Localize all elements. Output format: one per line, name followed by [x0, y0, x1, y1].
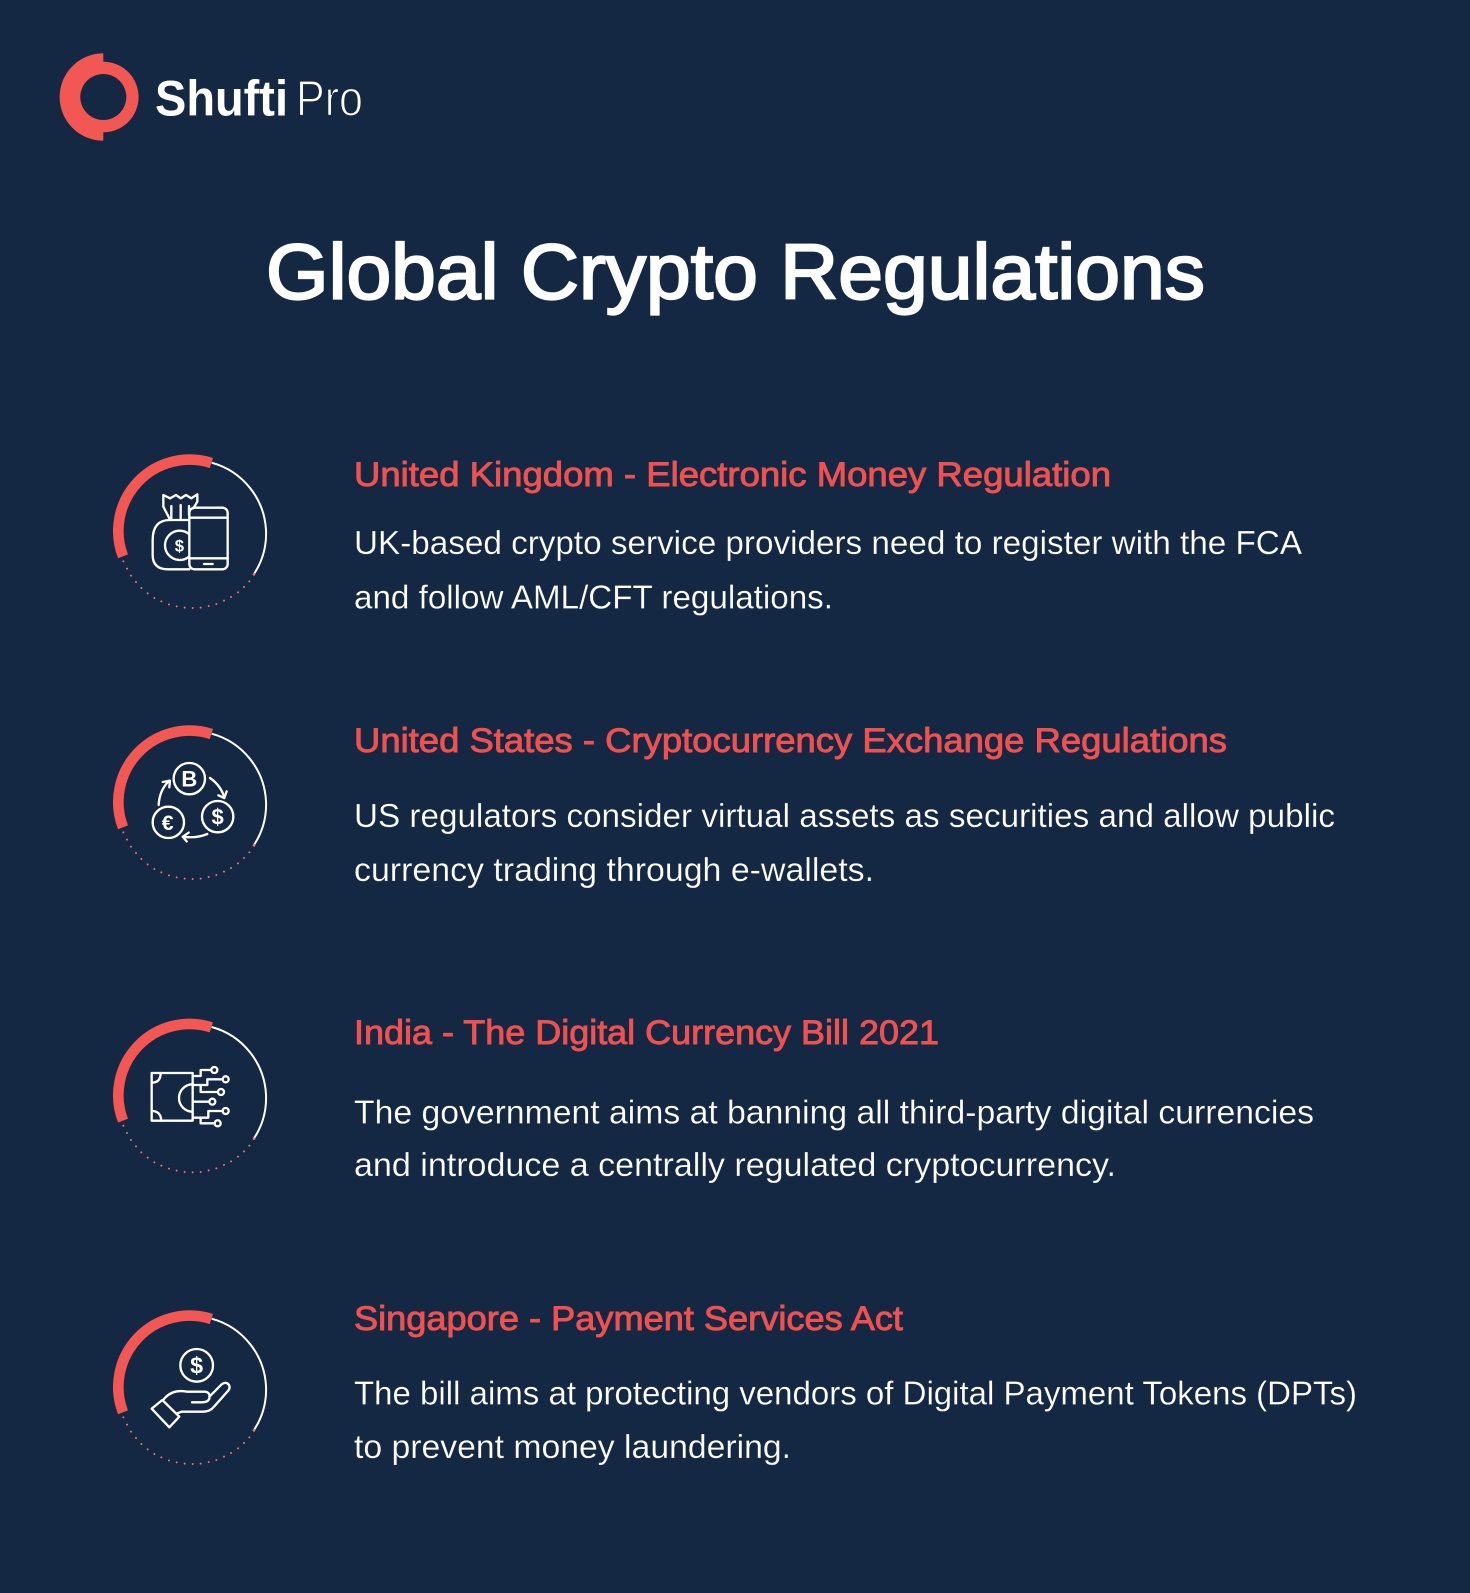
- row: India: [118, 1014, 1314, 1183]
- progress ring: [118, 1024, 266, 1173]
- icon: hand holding dollar coin: [152, 1349, 230, 1427]
- body text: [354, 1094, 1314, 1183]
- row: United Kingdom: [118, 456, 1302, 616]
- icon: hand holding dollar coin: $: [190, 1353, 203, 1379]
- logo mark: coral ring: [60, 53, 139, 141]
- icon: bitcoin, dollar, euro exchange: [153, 763, 233, 841]
- icon: banknote with circuit lines: [152, 1067, 229, 1126]
- icon: bitcoin, dollar, euro exchange: B: [181, 767, 197, 792]
- body text: US regulators consider virtual assets as securities and allow public: [354, 797, 1335, 834]
- logo wordmark: Pro: [296, 71, 363, 127]
- body text: and follow AML/CFT regulations.: [354, 578, 833, 616]
- body text: The government aims at banning all third-party digital currencies: [354, 1094, 1314, 1130]
- heading: United Kingdom - Electronic Money Regulation: [354, 456, 1111, 494]
- ring and icon: money bag and phone: [118, 460, 266, 609]
- row: United States: [118, 722, 1335, 888]
- logo wordmark: [155, 71, 363, 127]
- logo wordmark: Shufti: [155, 71, 288, 127]
- icon: bitcoin, dollar, euro exchange: $: [212, 805, 224, 830]
- heading: Singapore - Payment Services Act: [354, 1300, 904, 1338]
- ring and icon: currency exchange: [118, 731, 266, 880]
- body text: and introduce a centrally regulated cryptocurrency.: [354, 1146, 1116, 1183]
- body text: UK-based crypto service providers need to register with the FCA: [354, 524, 1302, 561]
- icon: bitcoin, dollar, euro exchange: €: [162, 811, 174, 835]
- progress ring: [118, 460, 266, 609]
- body text: currency trading through e-wallets.: [354, 851, 874, 888]
- ring and icon: digital banknote: [118, 1024, 266, 1173]
- body text: to prevent money laundering.: [354, 1428, 791, 1465]
- body text: The bill aims at protecting vendors of Digital Payment Tokens (DPTs): [354, 1374, 1357, 1412]
- heading: India - The Digital Currency Bill 2021: [354, 1014, 939, 1052]
- body text: [354, 1374, 1357, 1465]
- logo: Shufti Pro: [60, 53, 363, 141]
- body text: [354, 524, 1302, 616]
- icon: money bag and phone: $: [175, 536, 185, 555]
- row: Singapore: [118, 1300, 1357, 1465]
- ring and icon: hand holding coin: [118, 1316, 266, 1465]
- body text: [354, 797, 1335, 888]
- heading: United States - Cryptocurrency Exchange Regulations: [354, 722, 1227, 760]
- icon: money bag and phone: [153, 494, 228, 569]
- progress ring: [118, 731, 266, 880]
- progress ring: [118, 1316, 266, 1465]
- title: Global Crypto Regulations: [266, 228, 1205, 316]
